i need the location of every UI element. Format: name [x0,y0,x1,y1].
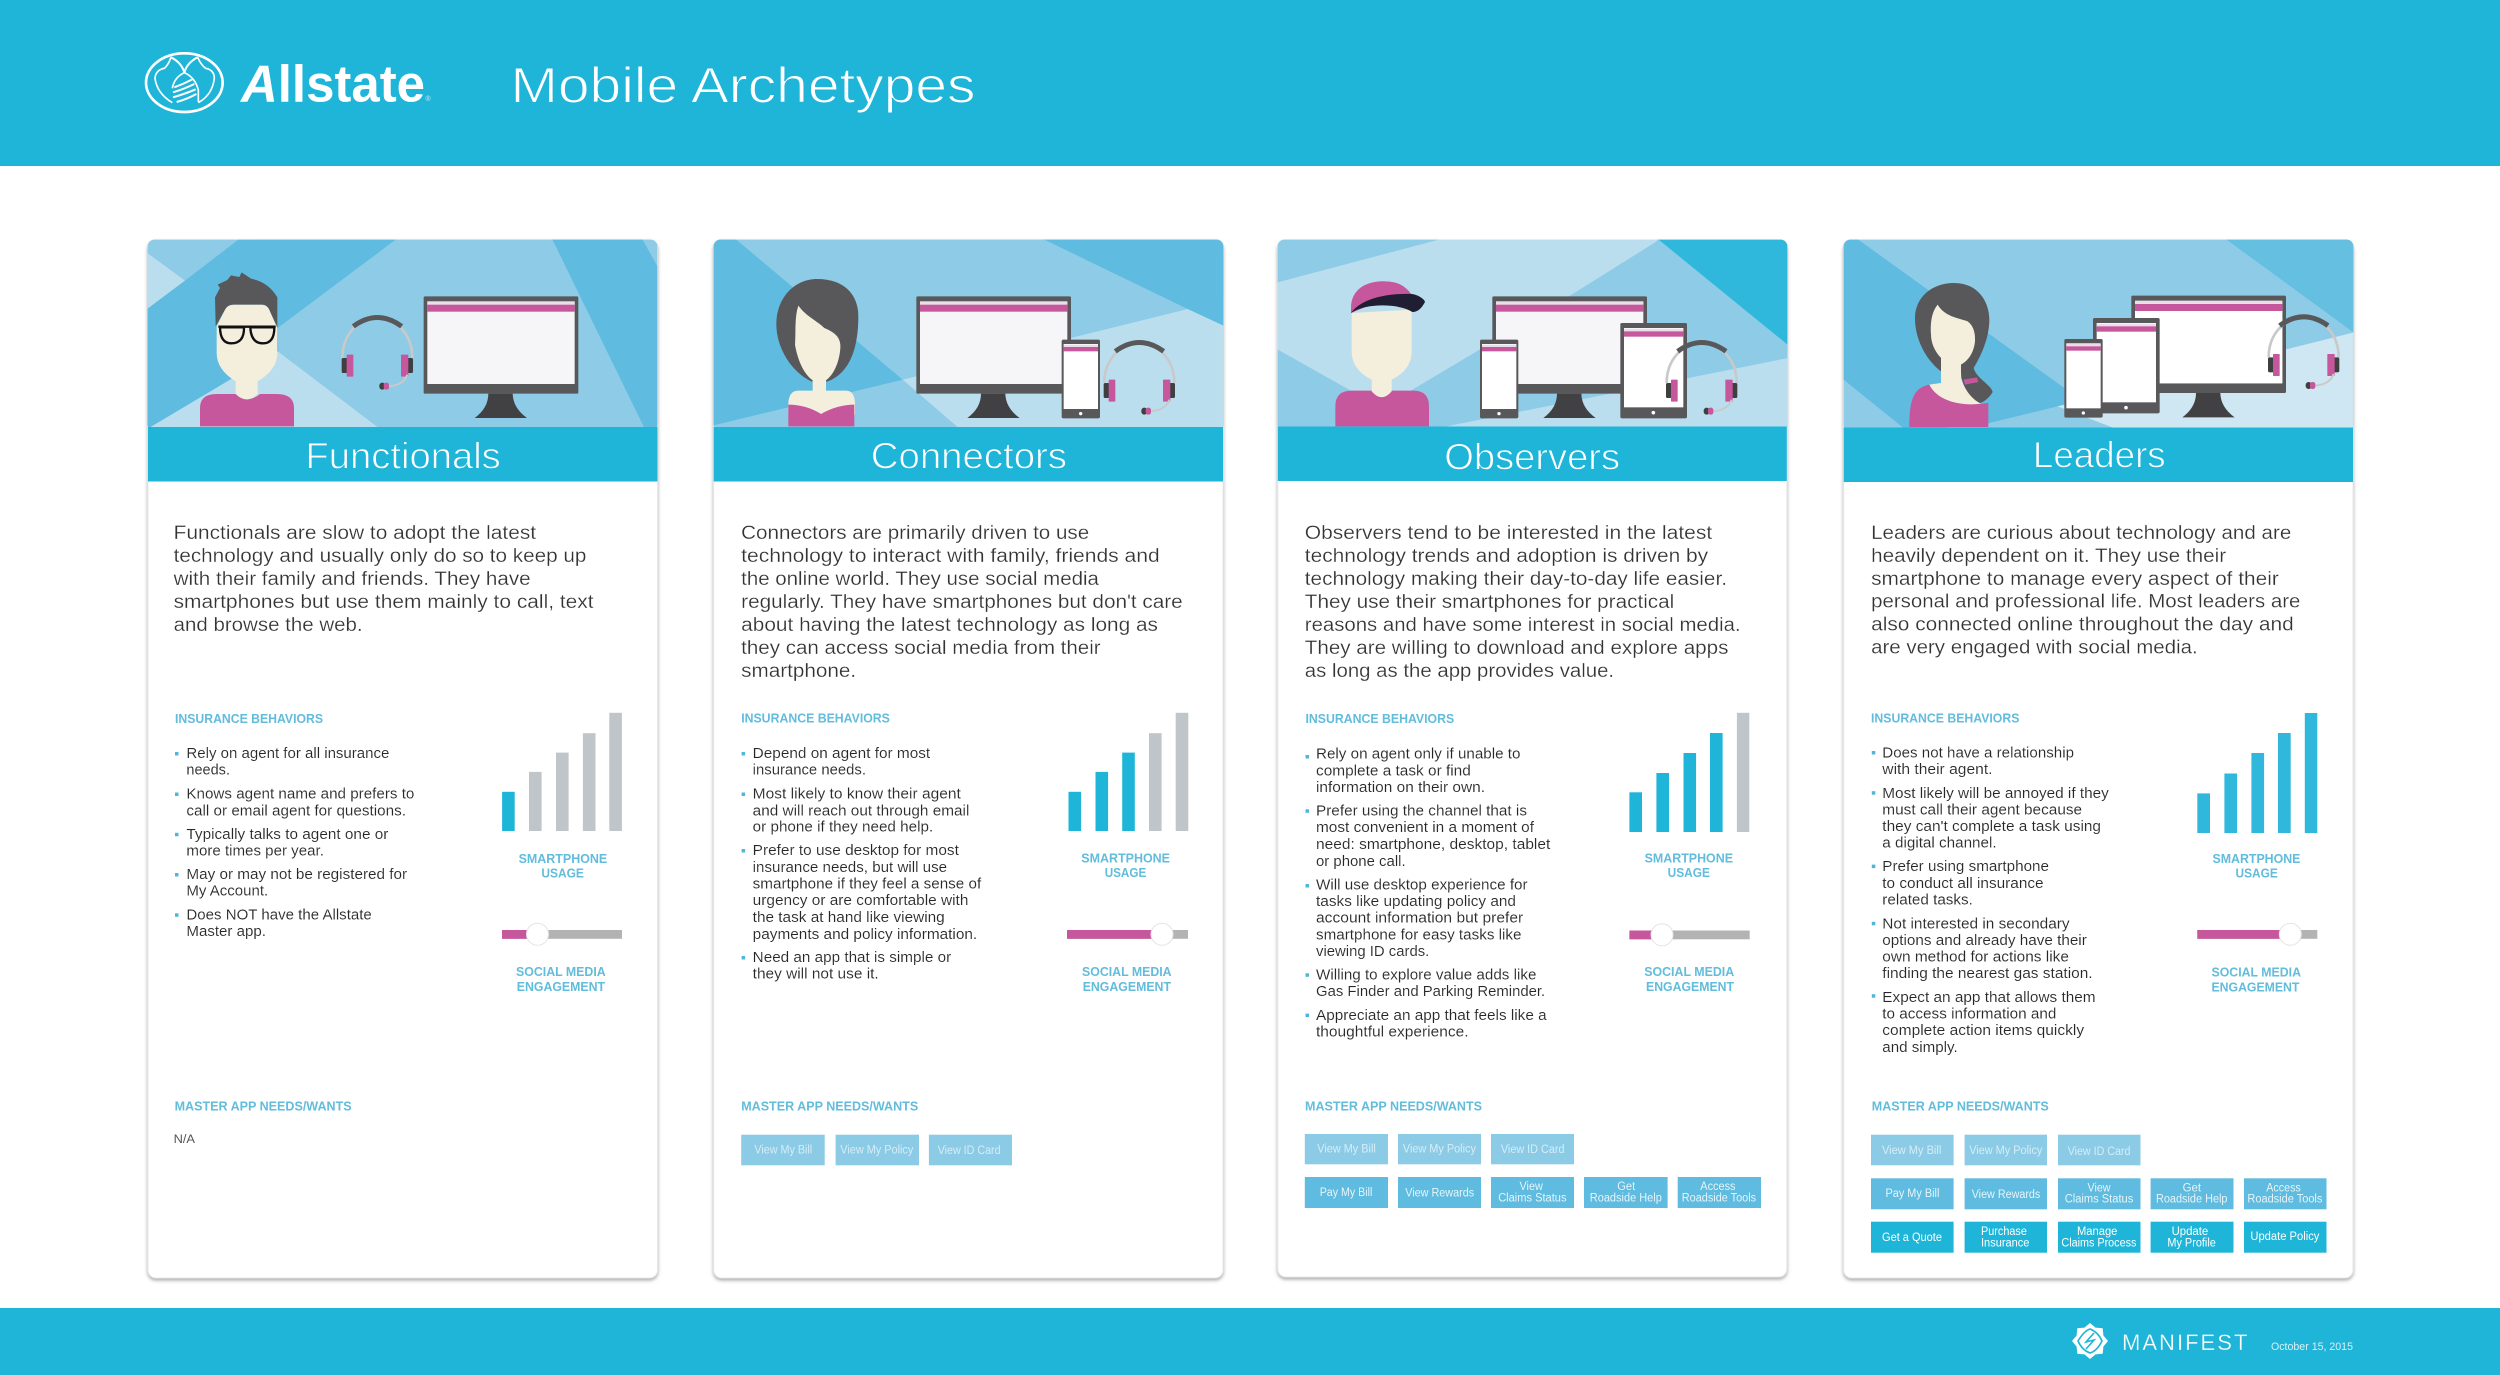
label: smartphone usage [2212,852,2300,881]
woman [776,279,858,426]
wordmark: MANIFEST [2122,1330,2247,1355]
buttons: row 3: Claims Process [2061,1238,2137,1250]
bullet list: Does NOT have the Allstate [186,907,372,923]
description: Observers tend to be interested in the latest [1305,523,1713,544]
description: also connected online throughout the day and [1871,615,2294,636]
buttons: row 1: View My Policy [840,1145,914,1157]
bullet list: needs. [186,762,230,778]
bullet list: they can't complete a task using [1882,819,2101,835]
description: are very engaged with social media. [1871,638,2198,659]
buttons: row 3: Insurance [1981,1238,2029,1250]
bullet list: Most likely will be annoyed if they [1882,786,2110,802]
needs: none: N/A [174,1134,195,1146]
label: social media engagement: SOCIAL MEDIA [2212,966,2301,980]
description: technology and usually only do so to keep up [174,546,586,567]
registered mark: ® [426,95,432,103]
bullet list: tasks like updating policy and [1316,894,1516,910]
title: Connectors [871,435,1067,476]
label: smartphone usage: USAGE [2236,867,2278,881]
bullet list: Rely on agent for all insurance [186,746,389,762]
bullet list: options and already have their [1882,933,2087,949]
slider: social media engagement [1629,924,1750,946]
panel: Connectors [711,238,1227,1278]
description: They use their smartphones for practical [1305,592,1674,613]
description: Connectors are primarily driven to use [741,523,1089,544]
bullet list: payments and policy information. [753,927,977,943]
buttons: row 3: My Profile [2167,1238,2216,1250]
label: social media engagement: SOCIAL MEDIA [516,965,606,979]
label: smartphone usage [1645,851,1733,880]
label: social media engagement: ENGAGEMENT [1083,980,1171,994]
label: social media engagement: ENGAGEMENT [1646,980,1734,994]
bullet list: a digital channel. [1882,835,1997,851]
woman with ponytail [1909,283,1993,427]
man [200,272,294,426]
logo: Allstate hands [146,53,223,112]
illustration: functional man with headset and monitor [145,238,661,431]
title: Mobile Archetypes [510,57,976,113]
description: and browse the web. [174,615,363,636]
bullet list: complete action items quickly [1882,1023,2085,1039]
bullet list: smartphone if they feel a sense of [753,876,981,892]
description: reasons and have some interest in social media. [1305,615,1741,636]
bullet list: more times per year. [186,844,324,860]
title band [1844,428,2353,482]
card background [1278,240,1787,1277]
header bar [0,0,2500,166]
label: smartphone usage: SMARTPHONE [1081,851,1170,865]
bullet list: and will reach out through email [753,803,969,819]
card background [148,240,658,1278]
buttons: row 2 [1871,1178,2326,1209]
slider: social media engagement [2197,923,2317,945]
bar chart: smartphone usage [1629,713,1749,832]
bullet list: or phone if they need help. [753,820,933,836]
description: heavily dependent on it. They use their [1871,546,2227,567]
bar chart: smartphone usage [1068,713,1188,831]
illustration: connector woman with monitor, phone and headset [711,238,1227,431]
bullet list: information on their own. [1316,780,1485,796]
bullet list: thoughtful experience. [1316,1025,1468,1041]
bullet list: finding the nearest gas station. [1882,966,2093,982]
buttons: row 2: Roadside Tools [1682,1193,1756,1205]
buttons: row 1: View My Policy [1969,1145,2043,1157]
bullet list: Need an app that is simple or [753,950,951,966]
illustration: leader woman with all devices [1841,238,2357,431]
bullet list: and simply. [1882,1040,1958,1056]
description: technology trends and adoption is driven by [1305,546,1709,567]
heading: insurance behaviors: INSURANCE BEHAVIORS [741,712,890,726]
bullet list: insurance needs, but will use [753,860,947,876]
bullet list: Prefer using smartphone [1882,859,2049,875]
bullet list: the task at hand like viewing [753,910,945,926]
buttons: row 2 [1305,1177,1761,1208]
description [1871,523,2300,659]
label: social media engagement [1082,965,1172,994]
title: Observers [1444,436,1620,477]
buttons: row 2: Pay My Bill [1320,1187,1372,1199]
bullet list [1872,746,2110,1056]
buttons: row 3: Purchase [1981,1226,2027,1238]
bullet list: account information but prefer [1316,910,1523,926]
description [741,523,1183,682]
description: about having the latest technology as long as [741,615,1158,636]
buttons: row 2: Roadside Help [2156,1194,2228,1206]
card background [1844,240,2353,1278]
label: smartphone usage: SMARTPHONE [519,852,607,866]
buttons: row 2: Access [2266,1182,2301,1194]
bullet list: insurance needs. [753,762,866,778]
title band [714,427,1223,482]
bullet list: May or may not be registered for [186,867,407,883]
description: Leaders are curious about technology and are [1871,523,2291,544]
bullet list: related tasks. [1882,893,1973,909]
label: smartphone usage: USAGE [541,867,584,881]
buttons: row 1 [1871,1135,2140,1165]
bullet list [175,746,414,940]
description [1305,523,1741,682]
heading: master app needs: MASTER APP NEEDS/WANTS [175,1100,352,1114]
description: as long as the app provides value. [1305,661,1614,682]
description: technology making their day-to-day life easier. [1305,569,1727,590]
bullet list: they will not use it. [753,967,879,983]
description: Functionals are slow to adopt the latest [174,523,537,544]
title band [148,427,658,482]
label: social media engagement: ENGAGEMENT [517,980,605,994]
buttons: row 2: Claims Status [1498,1193,1567,1205]
label: social media engagement [1644,965,1734,994]
bullet list: Expect an app that allows them [1882,990,2096,1006]
bullet list: Will use desktop experience for [1316,877,1528,893]
label: smartphone usage: USAGE [1105,866,1146,880]
card background [714,240,1223,1278]
buttons: row 1 [741,1135,1012,1165]
panel: Leaders [1841,238,2357,1278]
bullet list: Most likely to know their agent [753,786,961,802]
buttons: row 1: View ID Card [2068,1146,2130,1158]
heading: insurance behaviors: INSURANCE BEHAVIORS [1871,712,2019,726]
bar chart: smartphone usage [2197,713,2317,833]
buttons: row 3: Update Policy [2250,1231,2320,1243]
label: smartphone usage: SMARTPHONE [1645,851,1733,865]
bullet list: or phone call. [1316,854,1406,870]
bullet list: need: smartphone, desktop, tablet [1316,837,1550,853]
description: smartphones but use them mainly to call, text [174,592,594,613]
description: smartphone. [741,661,856,682]
slider: social media engagement [502,923,622,945]
description: personal and professional life. Most leaders are [1871,592,2300,613]
heading: master app needs: MASTER APP NEEDS/WANTS [741,1100,918,1114]
logo wordmark: Allstate [239,56,425,114]
label: smartphone usage: USAGE [1668,866,1710,880]
bullet list: must call their agent because [1882,802,2082,818]
buttons: row 2: Get [2183,1182,2202,1194]
bullet list: Willing to explore value adds like [1316,968,1536,984]
bullet list [1306,747,1550,1041]
bullet list: Rely on agent only if unable to [1316,747,1521,763]
illustration: observer man with all devices [1275,238,1791,431]
bullet list: Does not have a relationship [1882,746,2074,762]
title: Leaders [2033,435,2166,476]
date: October 15, 2015 [2271,1341,2353,1353]
buttons: row 2: Pay My Bill [1886,1188,1939,1200]
buttons: row 3 [1871,1222,2326,1253]
label: social media engagement: SOCIAL MEDIA [1082,965,1172,979]
bullet list: Depend on agent for most [753,746,930,762]
label: smartphone usage: SMARTPHONE [2212,852,2300,866]
bullet list: Not interested in secondary [1882,917,2071,933]
description: technology to interact with family, friends and [741,546,1160,567]
bullet list: Master app. [186,924,266,940]
bullet list: with their agent. [1881,762,1992,778]
bullet list: urgency or are comfortable with [753,893,968,909]
description: the online world. They use social media [741,569,1099,590]
bullet list: most convenient in a moment of [1316,820,1534,836]
buttons: row 2: Access [1700,1181,1736,1193]
man with cap [1335,281,1429,426]
bullet list: complete a task or find [1316,764,1471,780]
bullet list: call or email agent for questions. [186,803,406,819]
buttons: row 2: View Rewards [1405,1188,1474,1200]
logo: Manifest rosette [2072,1323,2108,1359]
buttons: row 1: View ID Card [1501,1144,1564,1156]
heading: master app needs: MASTER APP NEEDS/WANTS [1305,1100,1482,1114]
bullet list: own method for actions like [1882,950,2069,966]
bullet list: to access information and [1882,1006,2056,1022]
buttons: row 2: Get [1617,1181,1636,1193]
buttons: row 2: Roadside Tools [2247,1194,2323,1206]
buttons: row 1: View My Bill [1317,1144,1376,1156]
bullet list: viewing ID cards. [1316,944,1429,960]
heading: insurance behaviors: INSURANCE BEHAVIORS [1306,712,1454,726]
description: regularly. They have smartphones but don't care [741,592,1183,613]
label: social media engagement: ENGAGEMENT [2212,980,2300,994]
buttons: row 2: Roadside Help [1590,1193,1662,1205]
description: with their family and friends. They have [173,569,531,590]
label: social media engagement [516,965,606,994]
label: smartphone usage [1081,851,1170,880]
buttons: row 1 [1305,1134,1574,1164]
bullet list: Prefer to use desktop for most [753,843,959,859]
title: Functionals [305,435,501,476]
label: social media engagement: SOCIAL MEDIA [1644,965,1734,979]
bullet list [742,746,981,983]
label: social media engagement [2212,966,2301,994]
heading: insurance behaviors: INSURANCE BEHAVIORS [175,712,323,726]
description: they can access social media from their [741,638,1101,659]
bullet list: Gas Finder and Parking Reminder. [1316,984,1545,1000]
buttons: row 2: Claims Status [2065,1194,2134,1206]
buttons: row 1: View My Bill [754,1145,812,1157]
bullet list: Appreciate an app that feels like a [1316,1008,1547,1024]
bullet list: Prefer using the channel that is [1316,803,1527,819]
buttons: row 1: View My Policy [1403,1144,1476,1156]
bar chart: smartphone usage [502,713,622,831]
buttons: row 3: Get a Quote [1882,1232,1942,1244]
buttons: row 2: View [2088,1182,2111,1194]
buttons: row 1: View My Bill [1882,1145,1941,1157]
buttons: row 1: View ID Card [938,1145,1001,1157]
description: They are willing to download and explore apps [1305,638,1728,659]
description: smartphone to manage every aspect of their [1871,569,2280,590]
description [173,523,594,636]
bullet list: Typically talks to agent one or [186,827,389,843]
bullet list: smartphone for easy tasks like [1316,927,1522,943]
bullet list: Knows agent name and prefers to [186,786,414,802]
buttons: row 2: View [1520,1181,1543,1193]
label: smartphone usage [519,852,607,881]
footer bar [0,1308,2500,1375]
slider: social media engagement [1067,923,1188,945]
panel: Observers [1275,238,1791,1277]
bullet list: My Account. [186,883,268,899]
buttons: row 2: View Rewards [1972,1189,2041,1201]
panel: Functionals [145,238,661,1278]
buttons: row 3: Manage [2077,1226,2117,1238]
heading: master app needs: MASTER APP NEEDS/WANTS [1872,1100,2049,1114]
buttons: row 3: Update [2172,1226,2208,1238]
title band [1278,426,1787,481]
bullet list: to conduct all insurance [1882,876,2044,892]
